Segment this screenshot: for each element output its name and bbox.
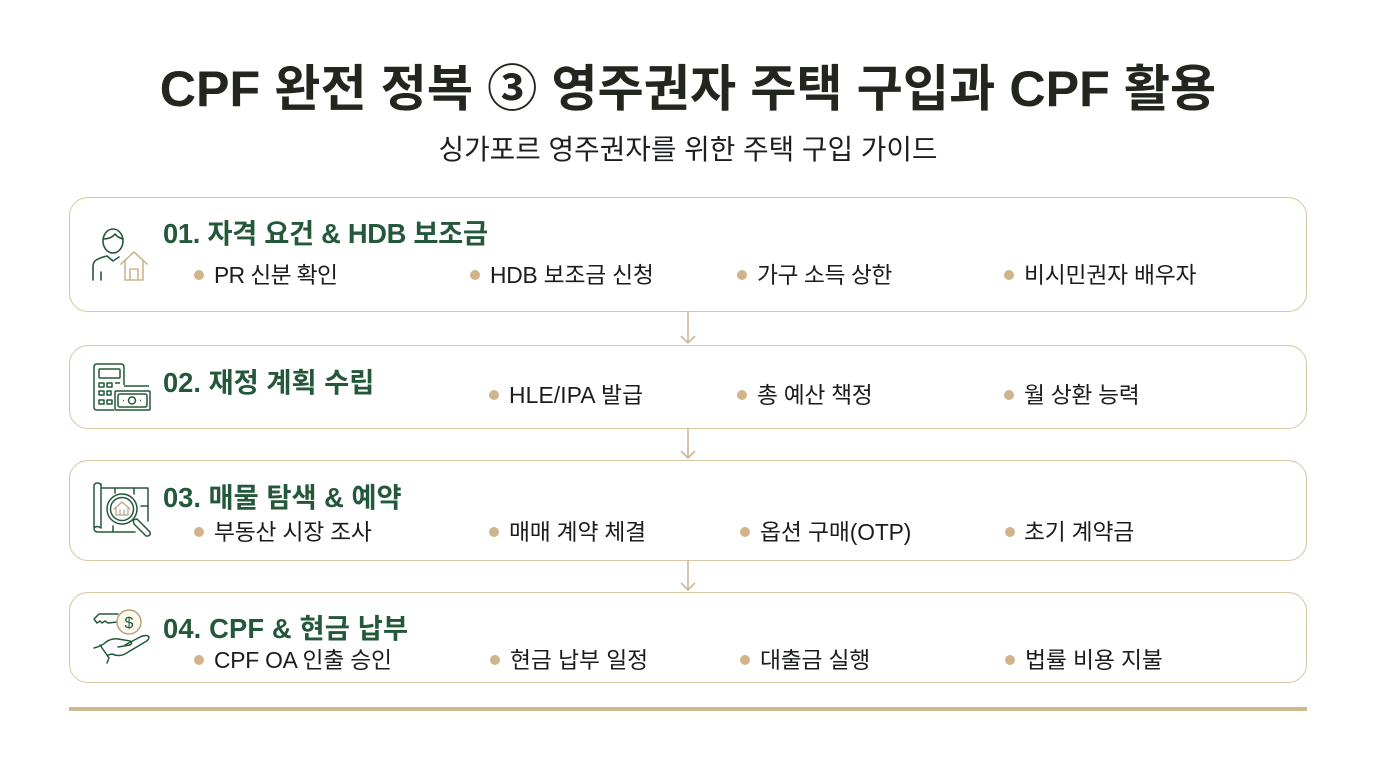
item text: HLE/IPA 발급	[509, 382, 643, 408]
icon: person with house	[92, 228, 148, 281]
item	[1004, 390, 1014, 400]
item text: 법률 비용 지불	[1025, 646, 1163, 672]
item	[470, 270, 480, 280]
item	[489, 527, 499, 537]
heading: 02. 재정 계획 수립	[163, 367, 374, 398]
item text: 매매 계약 체결	[509, 518, 646, 544]
item	[194, 527, 204, 537]
item text: 가구 소득 상한	[757, 262, 892, 288]
item text: 월 상환 능력	[1024, 382, 1139, 408]
item text: 대출금 실행	[760, 646, 870, 672]
title: CPF 완전 정복 ③ 영주권자 주택 구입과 CPF 활용	[160, 61, 1216, 117]
icon: map with magnifier	[93, 482, 151, 537]
arrow	[680, 560, 696, 591]
item	[490, 655, 500, 665]
item	[1005, 527, 1015, 537]
arrow	[680, 428, 696, 459]
icon: calculator and cash	[93, 363, 151, 411]
item	[1004, 270, 1014, 280]
item text: 옵션 구매(OTP)	[760, 518, 911, 544]
heading: 01. 자격 요건 & HDB 보조금	[163, 218, 488, 249]
arrow	[680, 311, 696, 344]
item text: 부동산 시장 조사	[214, 518, 372, 544]
item text: CPF OA 인출 승인	[214, 646, 392, 672]
item text: 비시민권자 배우자	[1024, 262, 1196, 288]
panel: 04 CPF and cash payment	[69, 592, 1307, 683]
item	[740, 655, 750, 665]
item	[1005, 655, 1015, 665]
item text: PR 신분 확인	[214, 262, 337, 288]
item	[194, 270, 204, 280]
subtitle: 싱가포르 영주권자를 위한 주택 구입 가이드	[439, 134, 937, 165]
panel: 02 financial plan	[69, 345, 1307, 429]
item	[194, 655, 204, 665]
icon: key coin and hand: $	[125, 615, 134, 632]
item text: 초기 계약금	[1024, 518, 1134, 544]
item text: HDB 보조금 신청	[490, 262, 654, 288]
panel: 01 eligibility	[69, 197, 1307, 312]
item	[737, 390, 747, 400]
heading: 03. 매물 탐색 & 예약	[163, 482, 402, 513]
item	[489, 390, 499, 400]
item	[740, 527, 750, 537]
heading: 04. CPF & 현금 납부	[163, 613, 408, 644]
panel: 03 property search	[69, 460, 1307, 561]
item	[737, 270, 747, 280]
item text: 총 예산 책정	[757, 382, 872, 408]
icon: key coin and hand	[93, 609, 150, 664]
item text: 현금 납부 일정	[510, 646, 648, 672]
footer bar	[69, 707, 1307, 711]
